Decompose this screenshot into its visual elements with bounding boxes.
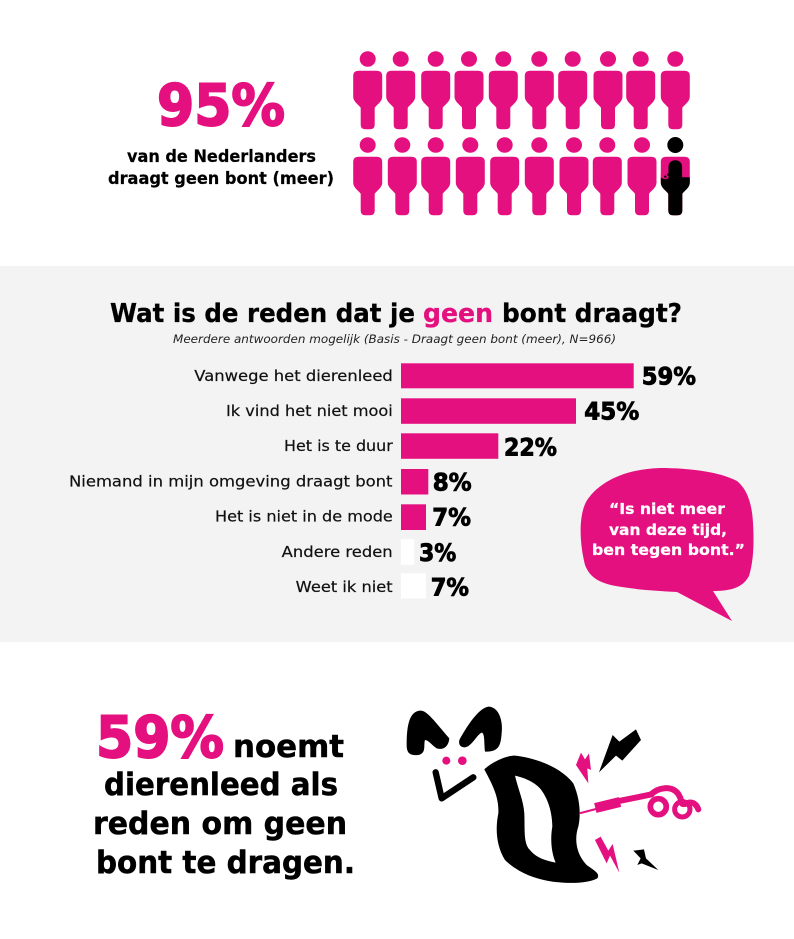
panel: reasons — [0, 266, 794, 642]
stat description — [108, 147, 334, 188]
panel heading — [110, 299, 682, 329]
icon: pink tail — [581, 788, 698, 817]
illustration: suffering animal — [407, 707, 698, 883]
icon: person with black fur coat — [661, 137, 690, 215]
bar: Vanwege het dierenleed 59% — [194, 362, 696, 390]
bar: Ik vind het niet mooi 45%: Ik vind het niet mooi — [226, 402, 393, 420]
conclusion text: dierenleed als — [104, 767, 338, 803]
panel heading: bont draagt? — [502, 299, 682, 329]
conclusion text: bont te dragen. — [96, 845, 355, 881]
conclusion text: reden om geen — [93, 806, 347, 842]
bar: Ik vind het niet mooi 45% — [226, 398, 639, 426]
bar: Het is te duur 22%: Het is te duur — [284, 437, 394, 455]
bar: Het is niet in de mode 7%: Het is niet in de mode — [215, 508, 393, 526]
bar: Niemand in mijn omgeving draagt bont 8%: Niemand in mijn omgeving draagt bont — [69, 473, 393, 491]
panel heading: geen — [423, 299, 493, 329]
icon: ears — [407, 707, 502, 755]
callout: speech bubble quote: ben tegen bont.” — [592, 541, 745, 559]
pictogram: 20 people, one partly black — [353, 51, 690, 215]
bar: Het is niet in de mode 7%: 7% — [432, 504, 471, 532]
panel heading: Wat is de reden dat je — [110, 299, 415, 329]
icon: eyes — [442, 756, 467, 765]
bar: Niemand in mijn omgeving draagt bont 8%: 8% — [433, 469, 472, 497]
bar: Weet ik niet 7%: Weet ik niet — [296, 578, 393, 596]
headline stat: 95%: 95% — [157, 73, 285, 139]
bar: Niemand in mijn omgeving draagt bont 8% — [69, 469, 472, 497]
bar: Vanwege het dierenleed 59%: Vanwege het dierenleed — [194, 367, 393, 385]
callout: speech bubble quote: van deze tijd, — [609, 521, 727, 539]
conclusion text: 59% — [96, 705, 224, 771]
bar: Vanwege het dierenleed 59%: 59% — [642, 362, 696, 390]
bar: Het is niet in de mode 7% — [215, 504, 471, 532]
bar: Weet ik niet 7%: 7% — [431, 574, 469, 602]
bar: Het is te duur 22%: 22% — [504, 434, 557, 462]
conclusion text — [93, 705, 355, 881]
bar: Andere reden 3%: Andere reden — [282, 543, 393, 561]
bar: Andere reden 3%: 3% — [419, 539, 456, 567]
callout: speech bubble quote — [581, 468, 754, 621]
stat description: draagt geen bont (meer) — [108, 169, 334, 188]
callout: speech bubble quote: “Is niet meer — [609, 500, 726, 518]
icon: fur body — [484, 756, 598, 883]
bar: Andere reden 3% — [282, 539, 456, 567]
icon: lightning bolts — [576, 729, 658, 873]
bar: Het is te duur 22% — [284, 433, 557, 462]
bar: Ik vind het niet mooi 45%: 45% — [584, 398, 639, 426]
conclusion text: noemt — [233, 729, 344, 765]
bar: Weet ik niet 7% — [296, 573, 469, 602]
panel subtitle: Meerdere antwoorden mogelijk (Basis - Draagt geen bont (meer), N=966) — [173, 332, 616, 346]
stat description: van de Nederlanders — [127, 147, 316, 166]
icon: mouth — [436, 772, 473, 798]
bar chart: reasons — [69, 362, 696, 602]
